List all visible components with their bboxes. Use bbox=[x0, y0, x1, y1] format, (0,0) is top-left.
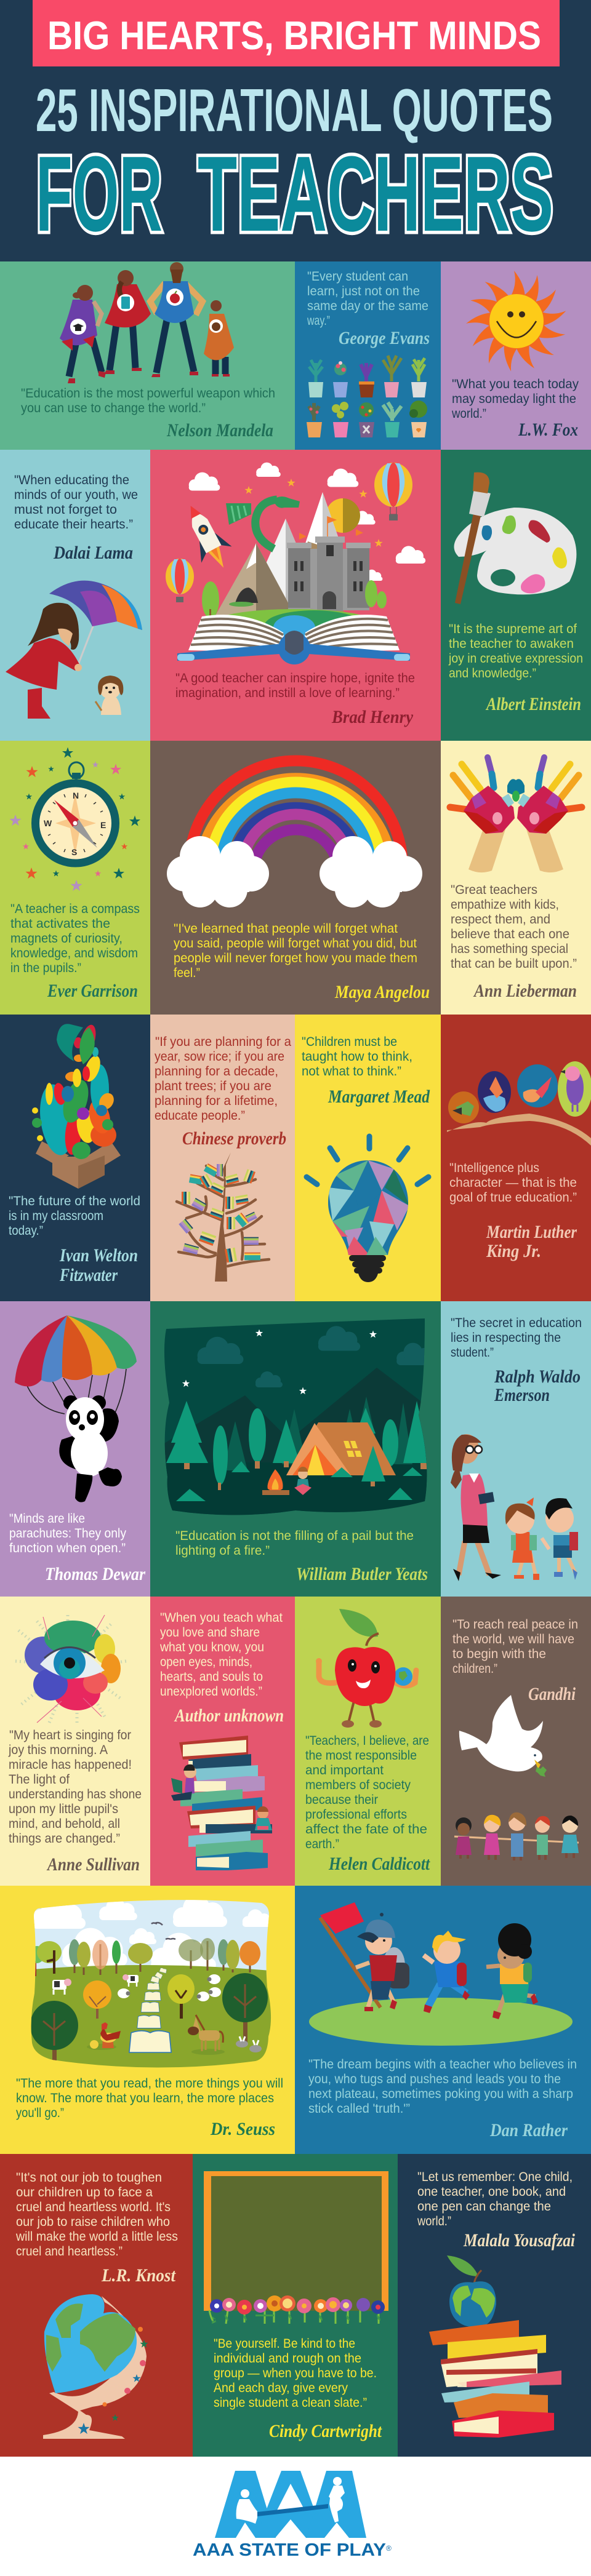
quote: imagination, and instill a love of learning.” bbox=[175, 686, 400, 700]
quote bbox=[308, 2057, 577, 2116]
quote: upon my little pupil's bbox=[9, 1802, 118, 1816]
quote: is in my classroom bbox=[9, 1209, 103, 1223]
author: Fitzwater bbox=[59, 1265, 118, 1285]
quote: learn, just not on the bbox=[307, 284, 420, 298]
illustration: heart-shaped globe on a stand bbox=[43, 2294, 148, 2439]
quote bbox=[8, 1728, 142, 1846]
quote: "If you are planning for a bbox=[155, 1035, 291, 1049]
author: Emerson bbox=[494, 1385, 550, 1405]
quote: that activates the bbox=[10, 917, 110, 931]
quote bbox=[15, 2171, 178, 2259]
quote bbox=[214, 2337, 377, 2410]
quote: our children up to face a bbox=[16, 2185, 153, 2199]
quote bbox=[307, 269, 428, 328]
quote: next plateau, sometimes poking you with a sharp bbox=[308, 2087, 573, 2101]
quote: "The dream begins with a teacher who believes in bbox=[308, 2057, 577, 2072]
illustration: potted plants bbox=[307, 356, 427, 437]
quote: one pen can change the bbox=[417, 2199, 551, 2214]
logo: AAA State of Play: ® bbox=[386, 2544, 392, 2553]
quote: "Let us remember: One child, bbox=[417, 2170, 573, 2184]
quote: and knowledge.” bbox=[449, 666, 536, 680]
quote: empathize with kids, bbox=[451, 898, 559, 912]
panel: Dan Rather bbox=[295, 1886, 591, 2154]
illustration: compass and stars bbox=[10, 747, 140, 891]
quote: the teacher to awaken bbox=[449, 637, 574, 651]
quote: function when open.” bbox=[9, 1541, 126, 1555]
quote bbox=[451, 1316, 582, 1360]
illustration: low-poly light bulb bbox=[307, 1136, 428, 1282]
illustration: painted hands bbox=[450, 757, 582, 872]
quote: "I've learned that people will forget what bbox=[174, 922, 398, 936]
panel: Chinese proverb bbox=[150, 1015, 295, 1301]
quote: "Education is not the filling of a pail but the bbox=[175, 1529, 414, 1543]
author: Helen Caldicott bbox=[328, 1854, 430, 1874]
illustration: globe apple on a stack of books bbox=[429, 2255, 561, 2438]
quote: because their bbox=[305, 1793, 378, 1807]
quote: "A good teacher can inspire hope, ignite the bbox=[175, 671, 415, 685]
quote: to begin with the bbox=[452, 1647, 546, 1661]
quote: "Every student can bbox=[307, 269, 408, 284]
quote: "A teacher is a compass bbox=[10, 902, 140, 916]
panel: Author unknown bbox=[150, 1597, 295, 1886]
illustration: girl with umbrella and dog bbox=[6, 581, 142, 719]
panel: L.W. Fox bbox=[441, 261, 591, 450]
panel: Dr. Seuss bbox=[0, 1886, 295, 2154]
quote: today.” bbox=[9, 1224, 43, 1238]
quote: "Children must be bbox=[302, 1035, 397, 1049]
logo: AAA State of Play bbox=[193, 2471, 392, 2560]
quote bbox=[155, 1035, 291, 1123]
quote: unexplored worlds.” bbox=[160, 1685, 262, 1699]
illustration: stack of books with readers bbox=[171, 1736, 272, 1870]
author: Maya Angelou bbox=[334, 982, 430, 1002]
quote: educate people.” bbox=[155, 1109, 245, 1123]
banner: big hearts bright minds bbox=[33, 0, 560, 66]
quote: what you know, you bbox=[159, 1640, 264, 1654]
quote: affect the fate of the bbox=[305, 1822, 427, 1836]
illustration: teacher walking with children bbox=[451, 1434, 578, 1581]
illustration: birds on a branch bbox=[447, 1061, 591, 1146]
panel: Ever Garrison bbox=[0, 741, 150, 1015]
illustration: children marching with a flag bbox=[309, 1902, 573, 2046]
quote: goal of true education.” bbox=[449, 1190, 577, 1205]
panel: Maya Angelou bbox=[150, 741, 441, 1015]
quote bbox=[10, 902, 140, 975]
illustration: paint palette and brush bbox=[454, 473, 576, 604]
quote: educate their hearts.” bbox=[14, 517, 133, 532]
quote: people will never forget how you made them bbox=[174, 951, 417, 965]
quote: taught how to think, bbox=[302, 1050, 412, 1064]
quote: must not forget to bbox=[14, 503, 117, 517]
quote: minds of our youth, we bbox=[14, 488, 138, 502]
quote bbox=[448, 622, 583, 680]
quote: will make the world a little less bbox=[15, 2230, 178, 2244]
quote bbox=[449, 1161, 577, 1205]
author: Author unknown bbox=[174, 1705, 284, 1726]
quote: "What you teach today bbox=[452, 377, 579, 391]
quote: "It is the supreme art of bbox=[449, 622, 577, 636]
quote: miracle has happened! bbox=[9, 1758, 132, 1772]
author: Margaret Mead bbox=[328, 1087, 430, 1107]
panel: Helen Caldicott bbox=[295, 1597, 441, 1886]
panel: Nelson Mandela bbox=[0, 261, 295, 450]
author: William Butler Yeats bbox=[296, 1564, 428, 1584]
panel: Malala Yousafzai bbox=[398, 2154, 591, 2457]
quote: "Minds are like bbox=[9, 1512, 85, 1526]
quote: earth.” bbox=[305, 1837, 339, 1851]
panel: Martin Luther King Jr. bbox=[441, 1015, 591, 1301]
quote: "The future of the world bbox=[9, 1194, 140, 1208]
author: Nelson Mandela bbox=[166, 420, 273, 441]
quote: single student a clean slate.” bbox=[214, 2396, 367, 2410]
author: Ann Lieberman bbox=[473, 981, 577, 1001]
quote: "The more that you read, the more things you will bbox=[16, 2076, 283, 2091]
quote: "It's not our job to toughen bbox=[16, 2171, 162, 2185]
quote: feel.” bbox=[174, 966, 200, 980]
quote bbox=[305, 1734, 429, 1851]
author bbox=[59, 1245, 138, 1285]
panel: Thomas Dewar bbox=[0, 1301, 150, 1597]
author: Ralph Waldo bbox=[494, 1366, 581, 1387]
quote: student.” bbox=[451, 1346, 494, 1360]
author: Anne Sullivan bbox=[46, 1854, 140, 1875]
panel: Ann Lieberman bbox=[441, 741, 591, 1015]
quote: And each day, give every bbox=[214, 2381, 348, 2395]
quote: respect them, and bbox=[451, 912, 550, 927]
quote bbox=[175, 1529, 414, 1558]
illustration: panda with parachute bbox=[15, 1315, 137, 1502]
panel: Margaret Mead bbox=[295, 1015, 441, 1301]
illustration: rainbow and clouds bbox=[167, 761, 422, 907]
quote: that can be built upon.” bbox=[451, 957, 577, 971]
quote: you said, people will forget what you did, but bbox=[174, 936, 417, 951]
quote: know. The more that you learn, the more places bbox=[16, 2091, 274, 2105]
quote bbox=[159, 1611, 283, 1699]
quote: year, sow rice; if you are bbox=[155, 1050, 284, 1064]
quote: same day or the same bbox=[307, 299, 428, 313]
illustration: dove with olive branch bbox=[459, 1695, 547, 1777]
quote: lighting of a fire.” bbox=[175, 1544, 270, 1558]
author: Thomas Dewar bbox=[45, 1564, 145, 1584]
title line: for teachers: FOR bbox=[36, 134, 163, 253]
quote: you'll go.” bbox=[16, 2106, 64, 2120]
quote: stick called 'truth.'” bbox=[308, 2102, 410, 2116]
footer background bbox=[0, 2457, 591, 2576]
quote: in the pupils.” bbox=[10, 961, 81, 975]
illustration: chalkboard and flowers bbox=[204, 2171, 388, 2324]
author: Dan Rather bbox=[489, 2120, 568, 2140]
quote: may someday light the bbox=[452, 392, 576, 406]
header background bbox=[0, 0, 591, 262]
quote: things are changed.” bbox=[9, 1832, 120, 1846]
quote bbox=[451, 883, 577, 971]
quote bbox=[451, 377, 579, 421]
quote: mind, and behold, all bbox=[9, 1817, 120, 1831]
panel: George Evans bbox=[295, 261, 441, 450]
quote: lies in respecting the bbox=[451, 1331, 561, 1345]
quote: "Intelligence plus bbox=[449, 1161, 539, 1175]
author: Ivan Welton bbox=[59, 1245, 138, 1266]
author bbox=[494, 1366, 581, 1405]
illustration: colourful ideas bursting from a box bbox=[32, 1023, 121, 1189]
quote bbox=[452, 1617, 578, 1676]
logo: AAA State of Play: AAA STATE OF PLAY bbox=[193, 2540, 386, 2560]
quote bbox=[174, 922, 417, 980]
quote: character — that is the bbox=[449, 1176, 577, 1190]
illustration: tree of books bbox=[177, 1152, 269, 1282]
quote: group — when you have to be. bbox=[214, 2366, 377, 2380]
quote: "Be yourself. Be kind to the bbox=[214, 2337, 355, 2351]
quote: "Great teachers bbox=[451, 883, 537, 897]
illustration: superhero teachers and children bbox=[60, 262, 234, 383]
title line: for teachers bbox=[36, 134, 553, 253]
illustration: compass and stars: E bbox=[100, 820, 106, 830]
quote: "To reach real peace in bbox=[452, 1617, 578, 1632]
author: King Jr. bbox=[486, 1241, 541, 1261]
quote: magnets of curiosity, bbox=[10, 931, 123, 946]
quote bbox=[175, 671, 415, 700]
panel: Gandhi bbox=[441, 1597, 591, 1886]
panel: Anne Sullivan bbox=[0, 1597, 150, 1886]
quote: the world, we will have bbox=[452, 1632, 574, 1646]
quote bbox=[16, 2076, 283, 2120]
quote: children.” bbox=[452, 1662, 497, 1676]
author: Dr. Seuss bbox=[210, 2119, 275, 2139]
quote bbox=[9, 1512, 126, 1555]
author: Gandhi bbox=[528, 1684, 576, 1704]
panel: Ralph Waldo Emerson bbox=[441, 1301, 591, 1597]
quote: parachutes: They only bbox=[9, 1526, 126, 1541]
quote: one teacher, one book, and bbox=[417, 2185, 566, 2199]
illustration: book path through the countryside bbox=[31, 1900, 271, 2067]
quote: members of society bbox=[305, 1778, 411, 1792]
quote: you love and share bbox=[160, 1625, 260, 1640]
illustration: smiling sun bbox=[466, 271, 568, 372]
quote: cruel and heartless world. It's bbox=[16, 2200, 171, 2214]
illustration: compass and stars: S bbox=[71, 847, 77, 857]
panel: William Butler Yeats bbox=[150, 1301, 441, 1597]
quote: you can use to change the world.” bbox=[21, 401, 206, 415]
quote: "When you teach what bbox=[160, 1611, 283, 1625]
author: George Evans bbox=[339, 328, 430, 348]
quote: and important bbox=[305, 1763, 384, 1777]
author: Dalai Lama bbox=[53, 543, 133, 563]
quote: planning for a decade, bbox=[155, 1064, 278, 1079]
author: L.R. Knost bbox=[101, 2265, 177, 2286]
author bbox=[486, 1222, 577, 1261]
author: L.W. Fox bbox=[518, 420, 578, 440]
quote: our job to raise children who bbox=[16, 2215, 170, 2229]
quote: hearts, and souls to bbox=[160, 1670, 263, 1684]
quote: believe that each one bbox=[451, 927, 569, 941]
quote: the most responsible bbox=[305, 1749, 417, 1763]
illustration: compass and stars: W bbox=[44, 818, 52, 828]
quote: cruel and heartless.” bbox=[16, 2244, 123, 2259]
quote: joy this morning. A bbox=[8, 1743, 108, 1757]
panel: Ivan Welton Fitzwater bbox=[0, 1015, 150, 1301]
quote: joy in creative expression bbox=[448, 652, 583, 666]
author: Cindy Cartwright bbox=[269, 2421, 382, 2441]
illustration: night campsite bbox=[160, 1317, 435, 1521]
panel: Brad Henry bbox=[150, 450, 441, 741]
quote: "When educating the bbox=[14, 473, 129, 487]
quote: "The secret in education bbox=[451, 1316, 582, 1330]
quote: understanding has shone bbox=[9, 1787, 142, 1801]
quote bbox=[21, 386, 275, 415]
panel: Albert Einstein bbox=[441, 450, 591, 741]
quote bbox=[9, 1194, 140, 1238]
quote: individual and rough on the bbox=[214, 2351, 361, 2366]
quote bbox=[417, 2170, 573, 2228]
quote: "Teachers, I believe, are bbox=[305, 1734, 429, 1748]
quote: "My heart is singing for bbox=[9, 1728, 131, 1742]
panel: Cindy Cartwright bbox=[193, 2154, 398, 2457]
quote: not what to think.” bbox=[302, 1064, 401, 1079]
quote: knowledge, and wisdom bbox=[10, 946, 138, 960]
author: Chinese proverb bbox=[182, 1128, 286, 1149]
quote: has something special bbox=[451, 942, 568, 956]
panel: Dalai Lama bbox=[0, 450, 150, 741]
illustration: smiling apple with worm friends bbox=[316, 1609, 416, 1728]
illustration: five children holding hands bbox=[454, 1812, 579, 1860]
quote bbox=[302, 1035, 412, 1079]
quote: way.” bbox=[307, 314, 330, 328]
quote: you, who tugs and pushes and leads you to the bbox=[308, 2072, 561, 2086]
quote: professional efforts bbox=[305, 1808, 407, 1822]
quote: planning for a lifetime, bbox=[155, 1094, 278, 1108]
quote: world.” bbox=[417, 2214, 451, 2228]
author: Brad Henry bbox=[331, 707, 414, 727]
quote bbox=[14, 473, 138, 532]
quote: plant trees; if you are bbox=[155, 1079, 271, 1093]
quote: "Education is the most powerful weapon which bbox=[21, 386, 275, 401]
illustration: eye in colourful paint splash bbox=[15, 1615, 126, 1723]
quote: open eyes, minds, bbox=[160, 1655, 252, 1669]
illustration: castle rising from open book bbox=[166, 463, 425, 664]
panel: L.R. Knost bbox=[0, 2154, 193, 2457]
quote: world.” bbox=[451, 407, 486, 421]
illustration: compass and stars: N bbox=[73, 791, 79, 800]
quote: The light of bbox=[9, 1772, 70, 1787]
author: Ever Garrison bbox=[47, 981, 138, 1001]
